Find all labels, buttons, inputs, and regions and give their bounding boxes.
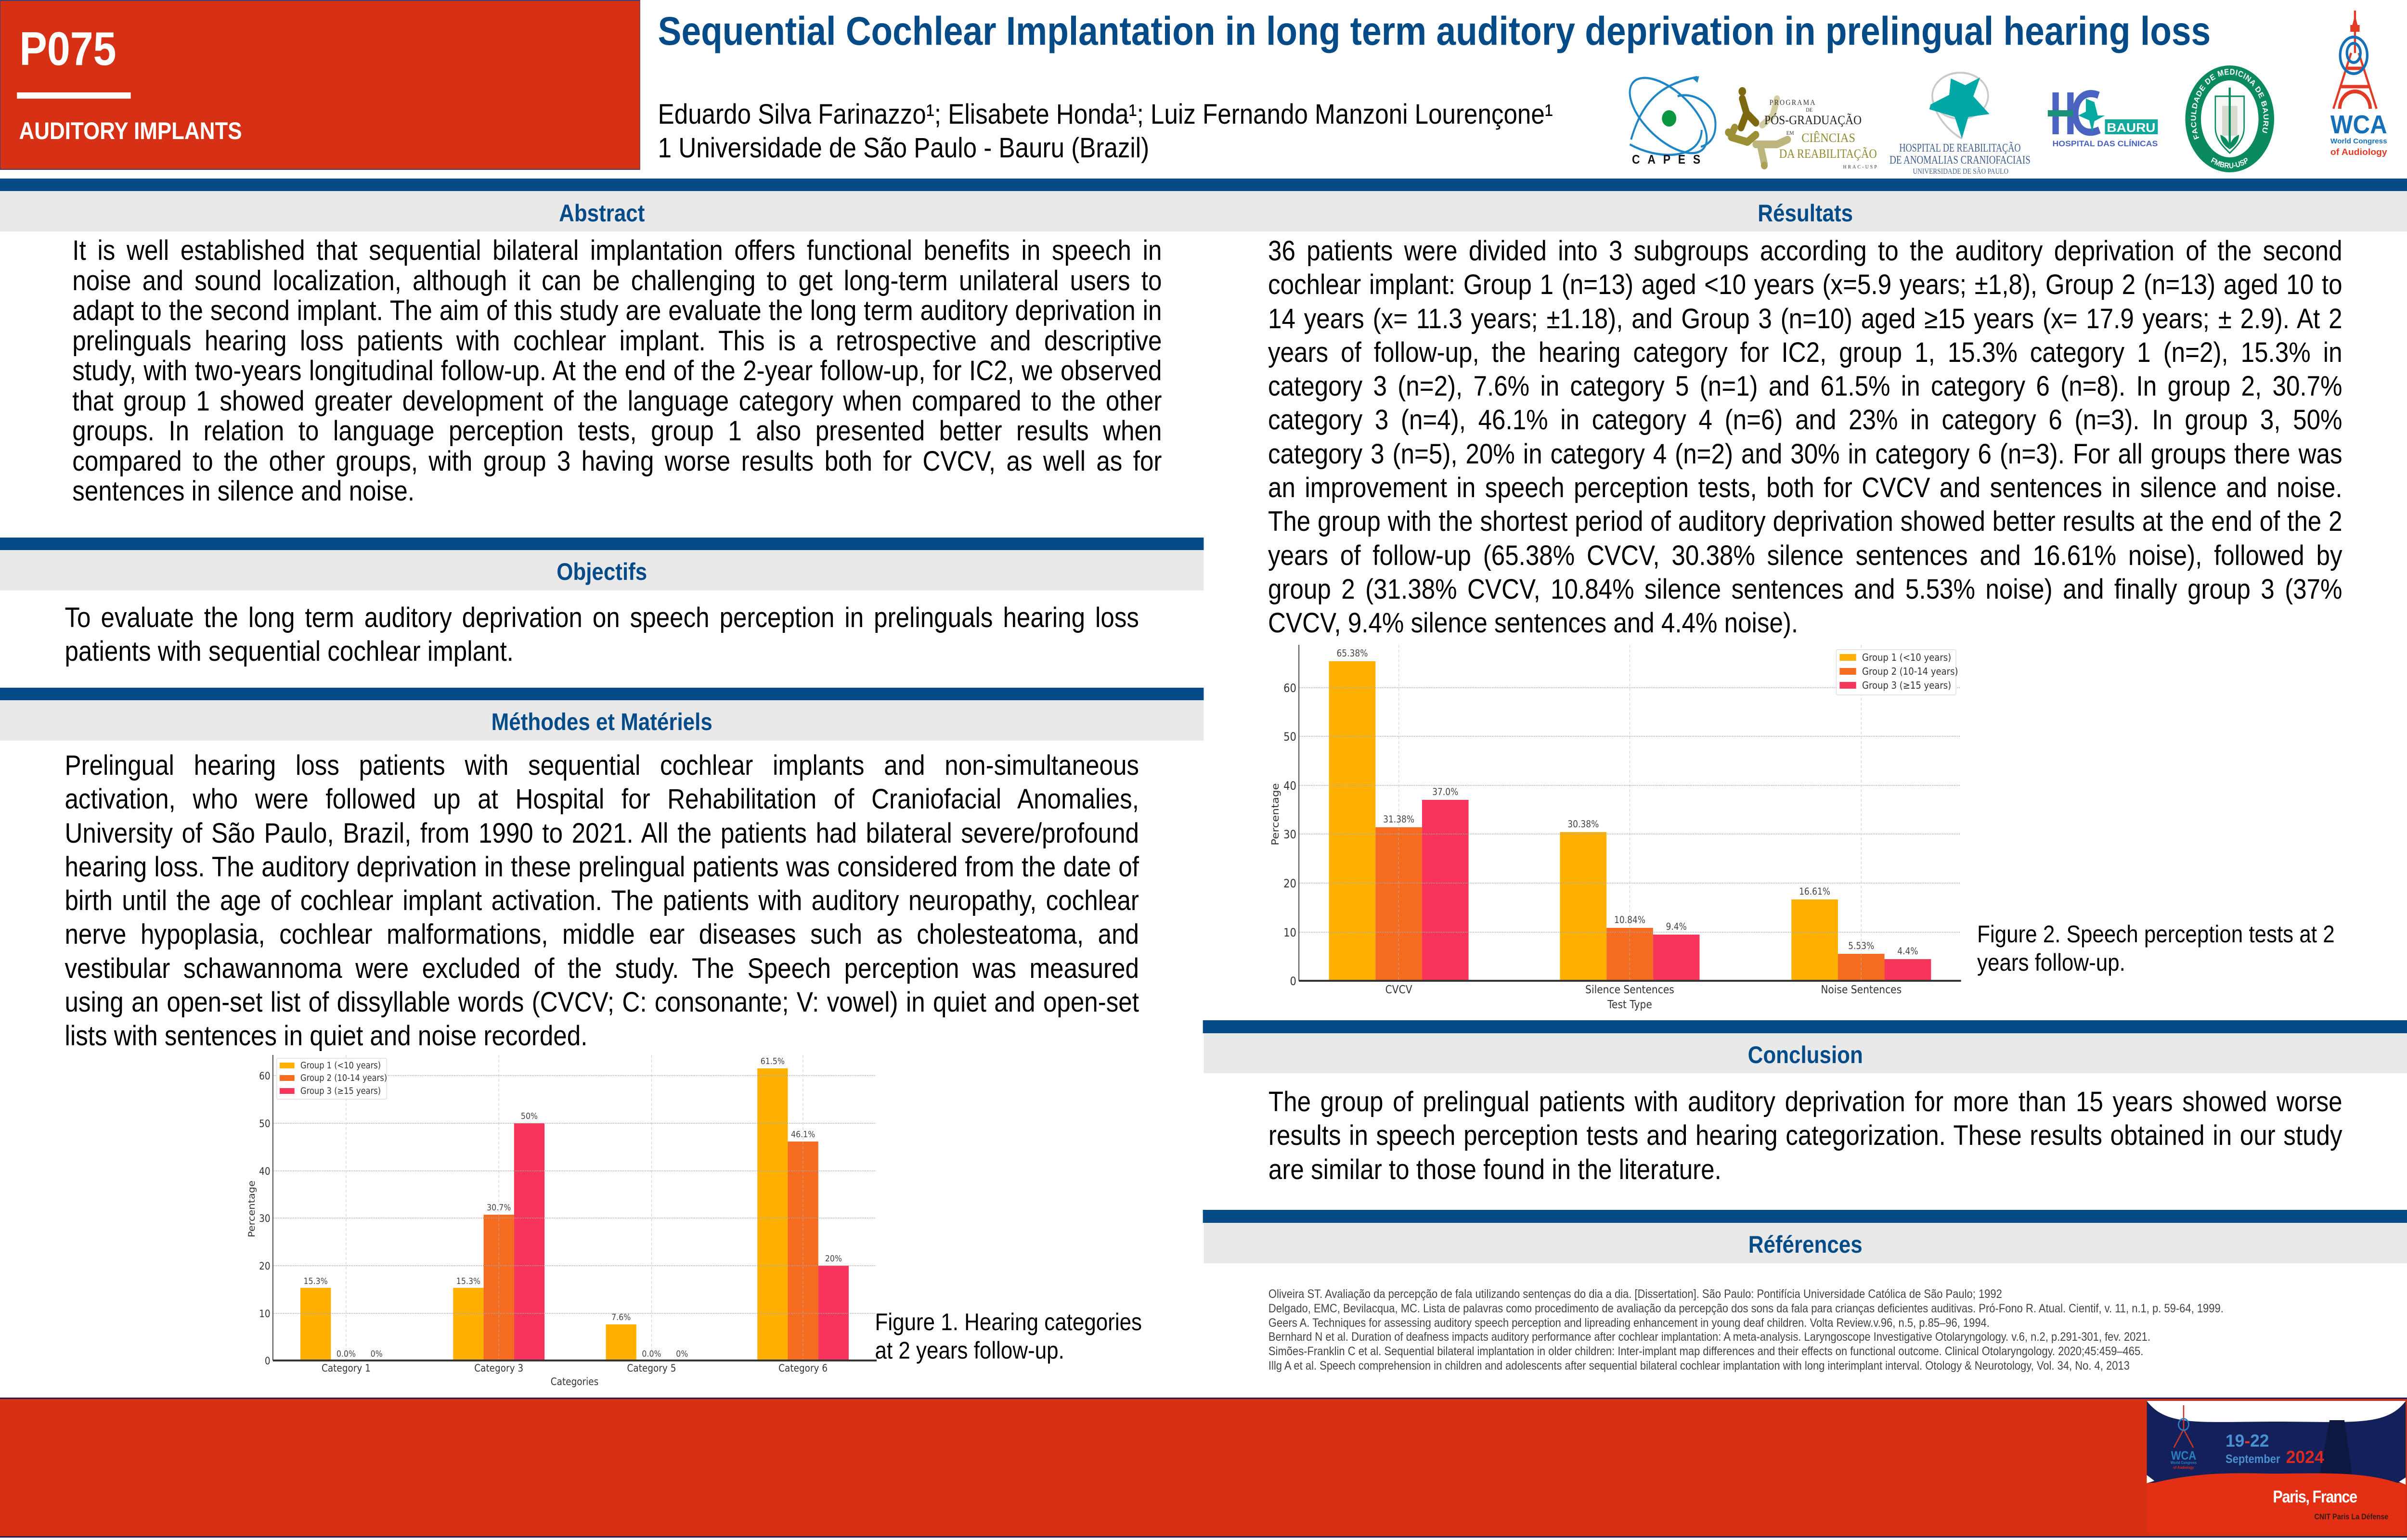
value labels: 15.3% bbox=[456, 1276, 480, 1286]
y axis ticks: 0 bbox=[1290, 975, 1296, 988]
panel: results text: category 3 (n=5), 20% in category 4 (n=2) and 30% in category 6 (n=3). For all groups there was bbox=[1268, 438, 2342, 470]
bar chart: speech perception tests bbox=[1265, 640, 1967, 1013]
panel: references list: Simões-Franklin C et al. Sequential bilateral implantation in older children: Inter-implant map differences and their effects on functional outcome. Clinical Otolaryngology. 2020;45:459–465. bbox=[1268, 1345, 2143, 1358]
panel: methods text: lists with sentences in quiet and noise recorded. bbox=[65, 1020, 587, 1052]
bars: group 3 bbox=[1422, 800, 1931, 981]
value labels: 0.0% bbox=[336, 1349, 356, 1359]
caption: figure 2 bbox=[1977, 920, 2335, 977]
panel: methods text: hearing loss. The auditory deprivation in these prelingual patients was considered from the date of bbox=[65, 851, 1139, 883]
legend bbox=[1836, 650, 1958, 695]
legend: Group 1 (<10 years) bbox=[300, 1061, 381, 1071]
title: Sequential Cochlear Implantation in long term auditory deprivation in prelingual hearing loss bbox=[658, 9, 2211, 53]
y axis ticks: 20 bbox=[259, 1260, 271, 1272]
value labels bbox=[1336, 648, 1918, 957]
header rule bbox=[0, 179, 2407, 191]
panel: objectives text bbox=[65, 601, 1139, 669]
footer graphic: congress banner bbox=[2147, 1401, 2406, 1533]
bars: group 2 bbox=[484, 1142, 818, 1360]
divider bar bbox=[17, 92, 131, 99]
panel: objectives text: To evaluate the long term auditory deprivation on speech perception in prelinguals hearing loss bbox=[65, 602, 1139, 633]
footer graphic: congress banner: Paris, France bbox=[2273, 1488, 2357, 1506]
caption: figure 1: at 2 years follow-up. bbox=[875, 1337, 1064, 1364]
value labels: 37.0% bbox=[1432, 786, 1458, 797]
panel: conclusion text: results in speech perception tests and hearing categorization. These results obtained in our study bbox=[1268, 1120, 2342, 1151]
logo: graduate programme: HRAC-USP bbox=[1843, 164, 1877, 170]
panel: references list: Oliveira ST. Avaliação da percepção de fala utilizando sentenças do dia a dia. [Dissertation]. São Paulo: Pontifícia Universidade Católica de São Paulo; 1992 bbox=[1268, 1287, 2002, 1301]
panel: abstract text: that group 1 showed greater development of the language category when compared to the other bbox=[72, 385, 1162, 417]
panel: methods text: using an open-set list of dissyllable words (CVCV; C: consonante; V: vowel) in quiet and open-set bbox=[65, 987, 1139, 1018]
test type labels bbox=[1270, 783, 1902, 1011]
panel: abstract text: groups. In relation to language perception tests, group 1 also presented better results when bbox=[72, 415, 1162, 447]
logo: graduate programme: DE bbox=[1806, 106, 1812, 113]
legend: Group 1 (<10 years) bbox=[1862, 652, 1951, 663]
bars: group 2 bbox=[1375, 827, 1885, 981]
value labels: 16.61% bbox=[1799, 886, 1830, 897]
panel: conclusion text: The group of prelingual patients with auditory deprivation for more than 15 years showed worse bbox=[1268, 1086, 2342, 1117]
footer graphic: congress banner: WCA bbox=[2171, 1449, 2196, 1463]
logo: CAPES: CAPES bbox=[1632, 152, 1708, 167]
panel: references heading bbox=[1204, 1223, 2407, 1263]
panel: results heading bbox=[1204, 191, 2407, 231]
panel: conclusion heading bbox=[1204, 1033, 2407, 1073]
footer graphic: congress banner: 2024 bbox=[2286, 1447, 2324, 1467]
logo: World Congress of Audiology: of Audiology bbox=[2330, 147, 2387, 157]
value labels: 50% bbox=[521, 1111, 538, 1121]
value labels: 30.38% bbox=[1567, 819, 1599, 830]
panel: results heading: Résultats bbox=[1758, 200, 1853, 227]
panel: objectives heading bbox=[0, 550, 1204, 590]
y axis ticks: 40 bbox=[259, 1166, 271, 1177]
value labels: 61.5% bbox=[761, 1056, 785, 1066]
bars: group 1 bbox=[300, 1068, 788, 1360]
panel: abstract heading: Abstract bbox=[559, 200, 645, 227]
panel: results text bbox=[1268, 234, 2342, 641]
panel: methods text bbox=[65, 749, 1139, 1053]
logo: medical faculty seal bbox=[2185, 65, 2274, 172]
y axis ticks: 30 bbox=[259, 1213, 271, 1224]
logo: Hospital das Clinicas Bauru: HOSPITAL DAS CLÍNICAS bbox=[2052, 139, 2158, 148]
panel: abstract text: adapt to the second implant. The aim of this study are evaluate the long term auditory deprivation in bbox=[72, 295, 1162, 326]
y axis ticks bbox=[259, 1070, 271, 1367]
logo: Hospital das Clinicas Bauru: BAURU bbox=[2107, 120, 2156, 135]
panel: results text: an improvement in speech perception tests, both for CVCV and sentences in silence and noise. bbox=[1268, 472, 2342, 503]
legend: Group 3 (≥15 years) bbox=[1862, 680, 1951, 691]
logo: World Congress of Audiology bbox=[2330, 11, 2387, 157]
y axis ticks: 10 bbox=[1283, 926, 1296, 939]
value labels: 5.53% bbox=[1848, 940, 1874, 951]
panel: abstract text: study, with two-years longitudinal follow-up. At the end of the 2-year follow-up, for IC2, we observed bbox=[72, 355, 1162, 386]
y axis ticks: 40 bbox=[1283, 779, 1296, 793]
test type labels: Silence Sentences bbox=[1585, 984, 1674, 996]
panel: methods text: vestibular schawannoma were excluded of the study. The Speech perception was measured bbox=[65, 953, 1139, 984]
category labels: Category 1 bbox=[322, 1362, 371, 1374]
category labels: Categories bbox=[551, 1376, 598, 1387]
logo: graduate programme bbox=[1725, 87, 1877, 170]
panel: abstract text: prelinguals hearing loss patients with cochlear implant. This is a retrospective and descriptive bbox=[72, 325, 1162, 357]
test type labels: Noise Sentences bbox=[1821, 984, 1902, 996]
value labels: 9.4% bbox=[1666, 921, 1687, 932]
methods band bbox=[0, 688, 1204, 700]
test type labels: CVCV bbox=[1385, 984, 1412, 996]
session topic: AUDITORY IMPLANTS bbox=[19, 117, 242, 144]
objectives band bbox=[0, 538, 1204, 550]
y axis ticks: 10 bbox=[259, 1308, 271, 1320]
panel: results text: years of follow-up, the hearing category for IC2, group 1, 15.3% category 1 (n=2), 15.3% in bbox=[1268, 337, 2342, 368]
caption: figure 1: Figure 1. Hearing categories bbox=[875, 1309, 1142, 1335]
bars: group 3 bbox=[514, 1123, 849, 1360]
value labels: 7.6% bbox=[611, 1312, 631, 1322]
panel: references list: Bernhard N et al. Duration of deafness impacts auditory performance after cochlear implantation: A meta-analysis. Laryngoscope Investigative Otolaryngology. v.6, n.2, p.291-301, fev. 2021. bbox=[1268, 1330, 2150, 1344]
value labels: 46.1% bbox=[791, 1129, 815, 1140]
references band bbox=[1203, 1210, 2407, 1223]
caption: figure 2: years follow-up. bbox=[1977, 949, 2125, 976]
panel: methods heading: Méthodes et Matériels bbox=[492, 708, 712, 735]
logo: graduate programme: PÓS-GRADUAÇÃO bbox=[1764, 113, 1862, 127]
panel: results text: 36 patients were divided into 3 subgroups according to the auditory deprivation of the second bbox=[1268, 235, 2342, 267]
y axis ticks: 20 bbox=[1283, 877, 1296, 890]
logo: graduate programme: DA REABILITAÇÃO bbox=[1779, 147, 1877, 161]
panel: methods text: birth until the age of cochlear implant activation. The patients with auditory neuropathy, cochlear bbox=[65, 885, 1139, 916]
panel: abstract heading bbox=[0, 191, 1204, 231]
logo: craniofacial hospital: UNIVERSIDADE DE SÃO PAULO bbox=[1913, 167, 2008, 176]
value labels: 31.38% bbox=[1383, 814, 1414, 825]
bar chart: hearing categories bbox=[237, 1044, 884, 1393]
caption: figure 2: Figure 2. Speech perception tests at 2 bbox=[1977, 921, 2335, 948]
panel: references list bbox=[1268, 1287, 2224, 1373]
authors and affiliation: 1 Universidade de São Paulo - Bauru (Brazil) bbox=[658, 132, 1149, 164]
value labels: 0.0% bbox=[642, 1349, 661, 1359]
logo: World Congress of Audiology: WCA bbox=[2330, 110, 2387, 139]
logo: graduate programme: CIÊNCIAS bbox=[1801, 131, 1855, 145]
panel: conclusion heading: Conclusion bbox=[1748, 1041, 1863, 1068]
category labels bbox=[246, 1181, 828, 1387]
panel: results text: The group with the shortest period of auditory deprivation showed better results at the end of the 2 bbox=[1268, 506, 2342, 537]
authors and affiliation bbox=[658, 99, 1553, 164]
footer graphic: congress banner: 19-22 bbox=[2226, 1431, 2269, 1450]
panel: results text: category 3 (n=4), 46.1% in category 4 (n=6) and 23% in category 6 (n=3). In group 3, 50% bbox=[1268, 404, 2342, 436]
value labels bbox=[304, 1056, 842, 1359]
value labels: 4.4% bbox=[1897, 946, 1918, 957]
category labels: Category 6 bbox=[778, 1362, 828, 1374]
legend: Group 2 (10-14 years) bbox=[300, 1073, 387, 1083]
panel: references list: Illg A et al. Speech comprehension in children and adolescents after sequential bilateral cochlear implantation with long interimplant interval. Otology & Neurotology, Vol. 34, No. 4, 2013 bbox=[1268, 1359, 2130, 1373]
footer band bbox=[0, 1398, 2407, 1538]
legend: Group 3 (≥15 years) bbox=[300, 1086, 381, 1096]
panel: abstract text: noise and sound localization, although it can be challenging to get long-term unilateral users to bbox=[72, 265, 1162, 296]
panel: results text: group 2 (31.38% CVCV, 10.84% silence sentences and 5.53% noise) and finally group 3 (37% bbox=[1268, 574, 2342, 605]
category labels: Percentage bbox=[246, 1181, 257, 1237]
logo: CAPES bbox=[1629, 76, 1717, 167]
panel: abstract text: It is well established that sequential bilateral implantation offers functional benefits in speech in bbox=[72, 235, 1162, 266]
panel: objectives heading: Objectifs bbox=[556, 558, 647, 585]
panel: conclusion text bbox=[1268, 1085, 2342, 1187]
panel: results text: 14 years (x= 11.3 years; ±1.18), and Group 3 (n=10) aged ≥15 years (x= 17.9 years; ± 2.9). At 2 bbox=[1268, 303, 2342, 334]
panel: results text: years of follow-up (65.38% CVCV, 30.38% silence sentences and 16.61% noise), followed by bbox=[1268, 540, 2342, 571]
value labels: 65.38% bbox=[1336, 648, 1368, 659]
panel: methods text: University of São Paulo, Brazil, from 1990 to 2021. All the patients had bilateral severe/profound bbox=[65, 818, 1139, 849]
y axis ticks: 30 bbox=[1283, 828, 1296, 841]
y axis ticks: 60 bbox=[259, 1070, 271, 1082]
logo: World Congress of Audiology: World Congress bbox=[2330, 137, 2387, 145]
value labels: 15.3% bbox=[304, 1276, 328, 1286]
footer graphic: congress banner: CNIT Paris La Défense bbox=[2315, 1512, 2388, 1521]
panel: abstract text: sentences in silence and noise. bbox=[72, 475, 414, 507]
logo: craniofacial hospital bbox=[1889, 72, 2031, 176]
legend bbox=[277, 1058, 387, 1099]
y axis ticks: 50 bbox=[259, 1118, 271, 1129]
category labels: Category 5 bbox=[627, 1362, 676, 1374]
red lower arch bbox=[2147, 1473, 2406, 1533]
panel: references heading: Références bbox=[1748, 1231, 1863, 1258]
logo: Hospital das Clinicas Bauru bbox=[2048, 90, 2158, 148]
test type labels: Test Type bbox=[1607, 999, 1652, 1011]
test type labels: Percentage bbox=[1270, 783, 1281, 846]
footer graphic: congress banner: September bbox=[2226, 1452, 2280, 1466]
category labels: Category 3 bbox=[474, 1362, 523, 1374]
panel: abstract text bbox=[72, 236, 1162, 507]
logo: medical faculty seal: FACULDADE DE MEDICINA DE BAURU bbox=[2191, 69, 2268, 140]
logo: medical faculty seal: FMBRU-USP bbox=[2211, 157, 2248, 168]
logo: graduate programme: EM bbox=[1786, 129, 1794, 136]
footer graphic: congress banner: World Congress bbox=[2171, 1461, 2197, 1465]
y axis ticks: 50 bbox=[1283, 730, 1296, 744]
panel: results text: cochlear implant: Group 1 (n=13) aged <10 years (x=5.9 years; ±1,8), Group 2 (n=13) aged 10 to bbox=[1268, 269, 2342, 300]
panel: conclusion text: are similar to those found in the literature. bbox=[1268, 1154, 1721, 1185]
value labels: 30.7% bbox=[487, 1203, 511, 1213]
conclusion band bbox=[1203, 1020, 2407, 1033]
panel: methods text: nerve hypoplasia, cochlear malformations, middle ear diseases such as cholesteatoma, and bbox=[65, 919, 1139, 950]
panel: methods heading bbox=[0, 700, 1204, 741]
panel: references list: Geers A. Techniques for assessing auditory speech perception and lipreading enhancement in young deaf children. Volta Review.v.96, n.5, p.85–96, 1994. bbox=[1268, 1316, 1990, 1330]
panel: methods text: Prelingual hearing loss patients with sequential cochlear implants and non-simultaneous bbox=[65, 750, 1139, 781]
value labels: 10.84% bbox=[1614, 914, 1645, 925]
value labels: 20% bbox=[825, 1254, 842, 1264]
y axis ticks bbox=[1283, 681, 1296, 988]
poster number: P075 bbox=[19, 22, 116, 75]
logo: graduate programme: PROGRAMA bbox=[1770, 99, 1815, 107]
header panel: session code bbox=[0, 0, 640, 170]
y axis ticks: 60 bbox=[1283, 681, 1296, 695]
panel: references list: Delgado, EMC, Bevilacqua, MC. Lista de palavras como procedimento de avaliação da percepção dos sons da fala para crianças deficientes auditivas. Pró-Fono R. Atual. Cientif, v. 11, n.1, p. 59-64, 1999. bbox=[1268, 1302, 2224, 1315]
footer graphic: congress banner: of Audiology bbox=[2174, 1465, 2194, 1470]
panel: abstract text: compared to the other groups, with group 3 having worse results both for CVCV, as well as for bbox=[72, 446, 1162, 477]
panel: results text: CVCV, 9.4% silence sentences and 4.4% noise). bbox=[1268, 607, 1798, 639]
panel: results text: category 3 (n=2), 7.6% in category 5 (n=1) and 61.5% in category 6 (n=8). In group 2, 30.7% bbox=[1268, 371, 2342, 402]
panel: methods text: activation, who were followed up at Hospital for Rehabilitation of Craniofacial Anomalies, bbox=[65, 783, 1139, 815]
panel: objectives text: patients with sequential cochlear implant. bbox=[65, 636, 514, 667]
authors and affiliation: Eduardo Silva Farinazzo¹; Elisabete Honda¹; Luiz Fernando Manzoni Lourençone¹ bbox=[658, 99, 1553, 130]
bars: group 1 bbox=[1329, 661, 1838, 981]
value labels: 0% bbox=[371, 1349, 383, 1359]
tower mark bbox=[2174, 1405, 2193, 1448]
value labels: 0% bbox=[676, 1349, 688, 1359]
legend: Group 2 (10-14 years) bbox=[1862, 666, 1958, 677]
caption: figure 1 bbox=[875, 1308, 1142, 1365]
y axis ticks: 0 bbox=[265, 1355, 271, 1367]
